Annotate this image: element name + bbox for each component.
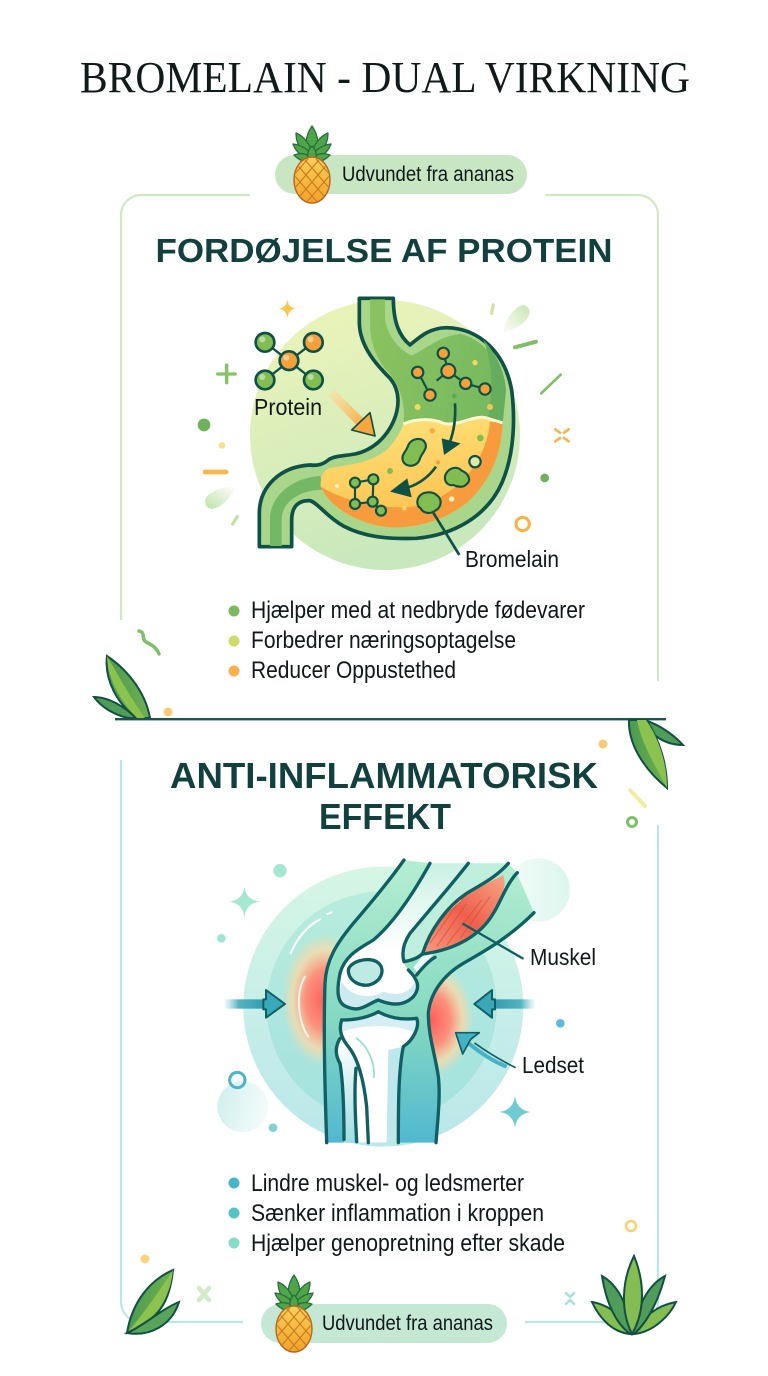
arrow: protein into stomach (328, 389, 375, 436)
label: Bromelain: Bromelain (465, 546, 559, 572)
list: digestion benefits: Hjælper med at nedbryde fødevarer (251, 597, 585, 624)
badge: extracted from pineapple (top) (275, 126, 527, 203)
white tendon (413, 952, 435, 974)
decoration: bottom left leaves (127, 1254, 209, 1334)
decoration: bottom right plant (566, 1221, 676, 1334)
list: inflammation benefits: Lindre muskel- og ledsmerter (251, 1170, 524, 1197)
stomach organ (259, 298, 514, 547)
compression arrows (223, 990, 536, 1067)
arrows inside stomach (390, 403, 461, 555)
badge text: Udvundet fra ananas (342, 163, 514, 186)
protein molecule (256, 333, 323, 389)
heading: anti-inflammatory effect (170, 755, 598, 837)
gastric acid (321, 417, 503, 527)
bones (338, 863, 468, 1009)
diagram: stomach (198, 298, 569, 570)
limb tissue (324, 860, 534, 1143)
decoration: leaves and squiggle left (94, 631, 172, 718)
list: inflammation benefits (228, 1170, 565, 1257)
icon: pineapple (293, 126, 331, 203)
diagram: knee joint (217, 858, 570, 1147)
label: Protein: Protein (254, 394, 322, 420)
patella (348, 960, 382, 985)
tendon leaf (403, 863, 508, 962)
small dots (335, 360, 493, 511)
badge: extracted from pineapple (bottom) (261, 1275, 507, 1352)
muscle (423, 875, 505, 954)
icon: pineapple (275, 1275, 313, 1352)
outlines (324, 860, 534, 1143)
decorations (217, 858, 570, 1132)
heading: anti-inflammatory effect: ANTI-INFLAMMATORISK (170, 755, 598, 796)
decorations around stomach (198, 299, 569, 531)
divider line (115, 718, 666, 720)
list: inflammation benefits: Sænker inflammation i kroppen (251, 1200, 544, 1227)
list: digestion benefits: Reducer Oppustethed (251, 657, 456, 684)
panel frame: digestion (121, 195, 658, 681)
list: digestion benefits: Forbedrer næringsoptagelse (251, 627, 516, 654)
leader line: muscle (463, 924, 523, 958)
badge text: Udvundet fra ananas (322, 1312, 493, 1335)
background circle (250, 300, 520, 570)
heading: anti-inflammatory effect: EFFEKT (319, 796, 451, 837)
molecule in stomach (412, 348, 491, 401)
label: Muskel: Muskel (530, 944, 596, 970)
decoration: leaves right (598, 720, 683, 826)
title: BROMELAIN - DUAL VIRKNING (80, 53, 690, 102)
heading: protein digestion: FORDØJELSE AF PROTEIN (156, 232, 612, 269)
list: inflammation benefits: Hjælper genopretning efter skade (251, 1230, 565, 1257)
label: Ledset: Ledset (522, 1052, 585, 1078)
digested fragments (350, 439, 481, 516)
background circles (243, 867, 523, 1147)
list: digestion benefits (228, 597, 585, 684)
panel frame: inflammation (121, 760, 658, 1322)
highlights (291, 912, 332, 953)
inflammation glows (282, 933, 368, 1067)
